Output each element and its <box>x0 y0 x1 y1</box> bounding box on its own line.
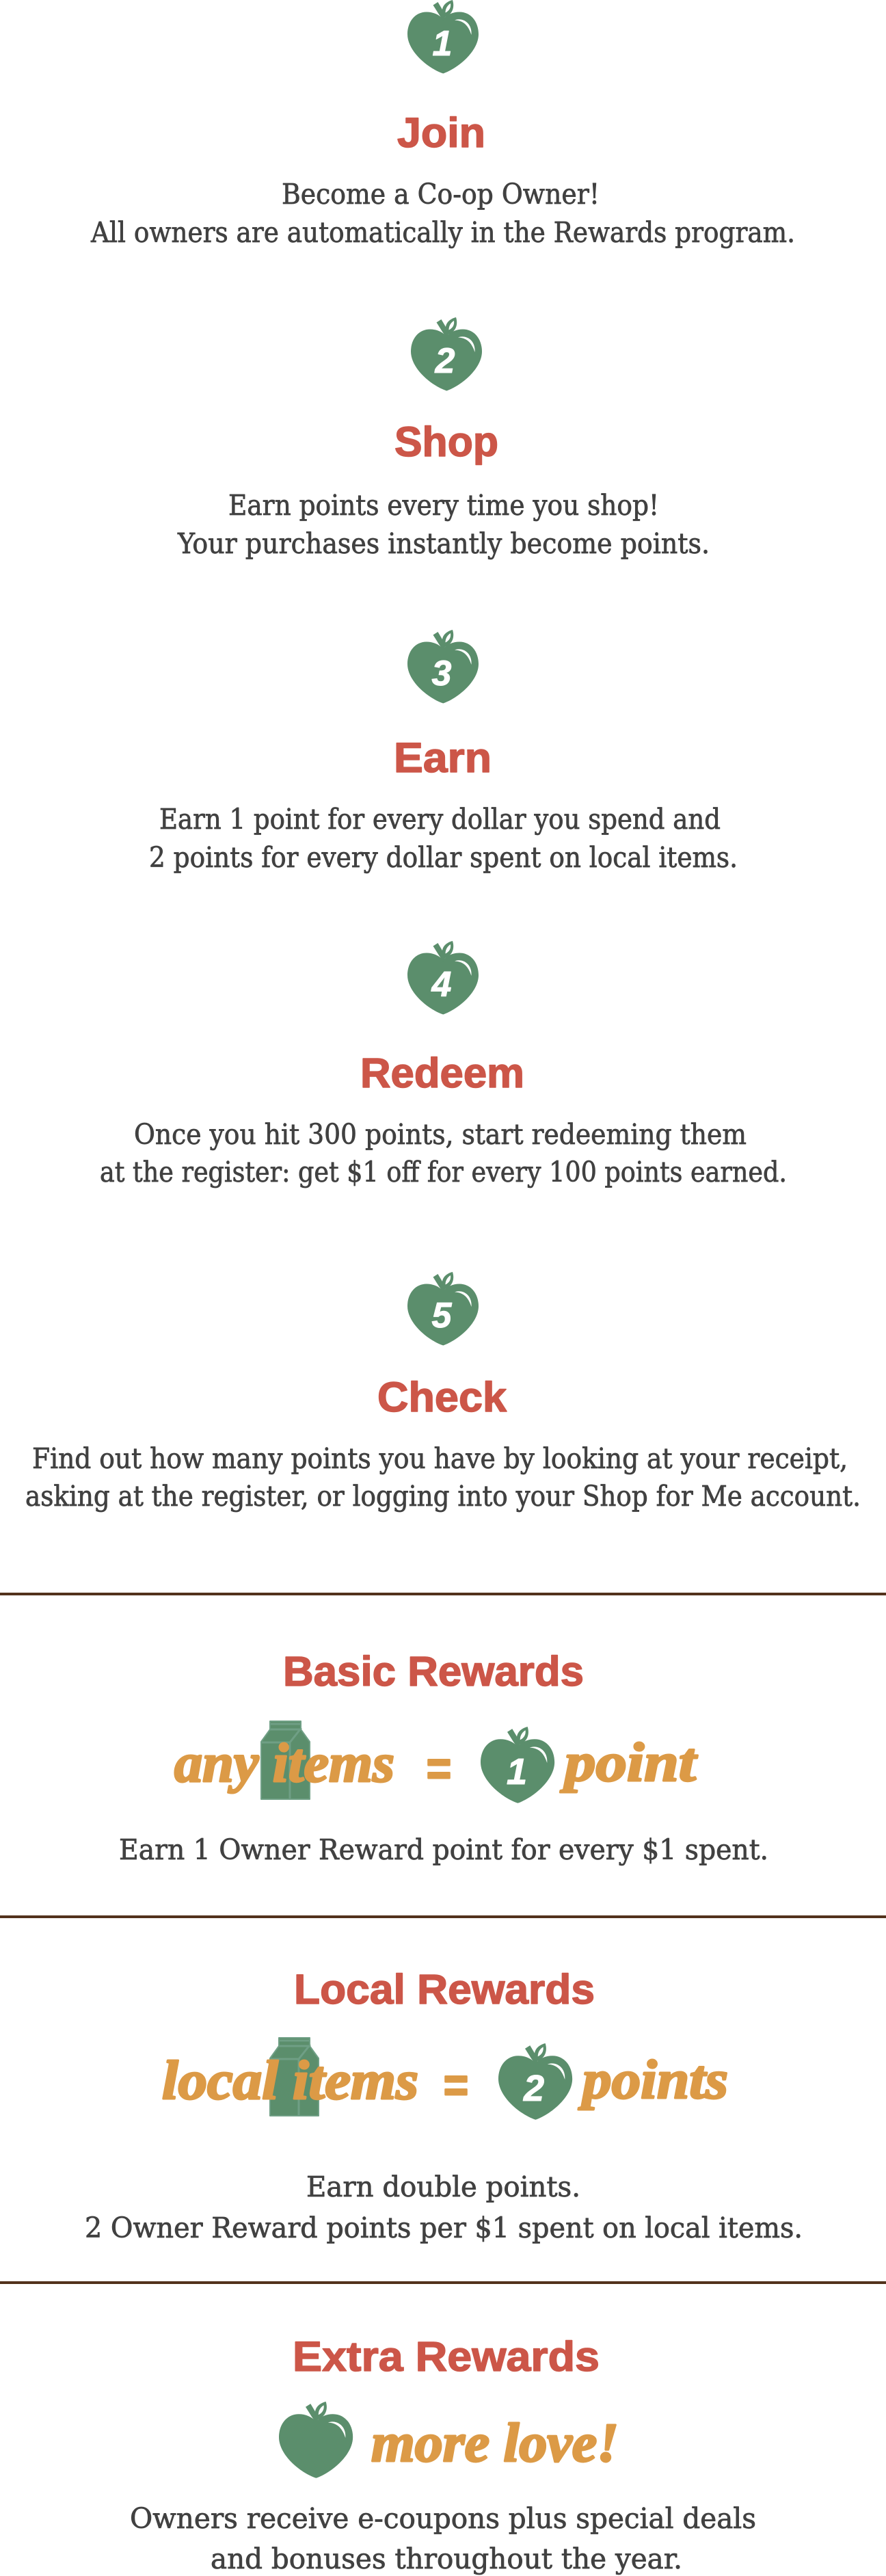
heading: Shop: Shop <box>394 419 498 465</box>
icon: apple 4: 4 <box>431 965 452 1005</box>
icon: apple 5: 5 <box>432 1296 453 1336</box>
equation text: points: points <box>578 2050 728 2110</box>
icon: apple 4 <box>407 941 479 1015</box>
panel: step 5 check <box>25 1272 861 1513</box>
heading: Join: Join <box>397 109 485 156</box>
equation text: any items: any items <box>174 1734 394 1794</box>
panel: extra rewards <box>130 2333 756 2575</box>
equals sign: = <box>427 1742 451 1795</box>
equals sign: = <box>444 2058 468 2112</box>
text block: basic rewards: Earn 1 Owner Reward point for every $1 spent. <box>119 1833 768 1866</box>
text block: redeem <box>100 1118 787 1189</box>
icon: apple 2 <box>411 317 482 391</box>
heading: Check: Check <box>377 1374 507 1420</box>
text block: earn <box>149 803 738 874</box>
text block: check: asking at the register, or logging into your Shop for Me account. <box>25 1480 861 1513</box>
text block: redeem: Once you hit 300 points, start redeeming them <box>134 1118 747 1151</box>
text block: check: Find out how many points you have by looking at your receipt, <box>32 1442 848 1475</box>
text block: redeem: at the register: get $1 off for every 100 points earned. <box>100 1156 787 1189</box>
equation text: more love: more love! <box>371 2413 619 2473</box>
text block: extra rewards <box>130 2502 756 2575</box>
icon: apple 2: 2 <box>435 341 455 381</box>
text block: extra rewards: and bonuses throughout the year. <box>211 2542 682 2575</box>
icon: apple 3 <box>407 630 479 703</box>
icon: apple 3: 3 <box>432 654 452 693</box>
heading: Extra Rewards: Extra Rewards <box>293 2333 600 2380</box>
text block: join <box>90 178 795 249</box>
text block: earn: 2 points for every dollar spent on local items. <box>149 841 738 874</box>
text block: local rewards: Earn double points. <box>306 2170 580 2203</box>
icon: apple 2: 2 <box>523 2068 544 2109</box>
icon: apple 1 <box>407 0 479 74</box>
panel: local rewards <box>85 1966 803 2244</box>
icon: apple 5 <box>407 1272 479 1346</box>
heading: Local Rewards: Local Rewards <box>294 1966 595 2013</box>
icon: apple 1: 1 <box>507 1751 527 1792</box>
text block: shop: Earn points every time you shop! <box>228 489 659 522</box>
heading: Basic Rewards: Basic Rewards <box>283 1648 584 1695</box>
text block: shop <box>177 489 710 560</box>
text block: earn: Earn 1 point for every dollar you spend and <box>159 803 721 836</box>
panel: step 1 join <box>90 0 795 249</box>
panel: step 3 earn <box>149 630 738 874</box>
text block: local rewards <box>85 2170 803 2244</box>
equation text: point: point <box>560 1733 698 1793</box>
equation text: local items: local items <box>162 2051 418 2111</box>
heading: Earn: Earn <box>394 734 492 781</box>
heading: Redeem: Redeem <box>360 1050 524 1096</box>
text block: join: All owners are automatically in the Rewards program. <box>90 216 795 249</box>
icon: carton <box>270 2038 319 2116</box>
text block: local rewards: 2 Owner Reward points per $1 spent on local items. <box>85 2212 803 2244</box>
icon: apple 1 <box>481 1727 554 1803</box>
text block: extra rewards: Owners receive e-coupons plus special deals <box>130 2502 756 2535</box>
icon: apple 1: 1 <box>433 24 452 64</box>
panel: basic rewards <box>119 1648 768 1866</box>
icon: carton <box>261 1721 310 1799</box>
text block: shop: Your purchases instantly become points. <box>177 527 710 560</box>
panel: step 4 redeem <box>100 941 787 1189</box>
text block: check <box>25 1442 861 1513</box>
icon: apple 2 <box>498 2043 572 2120</box>
text block: join: Become a Co-op Owner! <box>282 178 600 211</box>
icon: apple <box>279 2402 353 2478</box>
panel: step 2 shop <box>177 317 710 560</box>
